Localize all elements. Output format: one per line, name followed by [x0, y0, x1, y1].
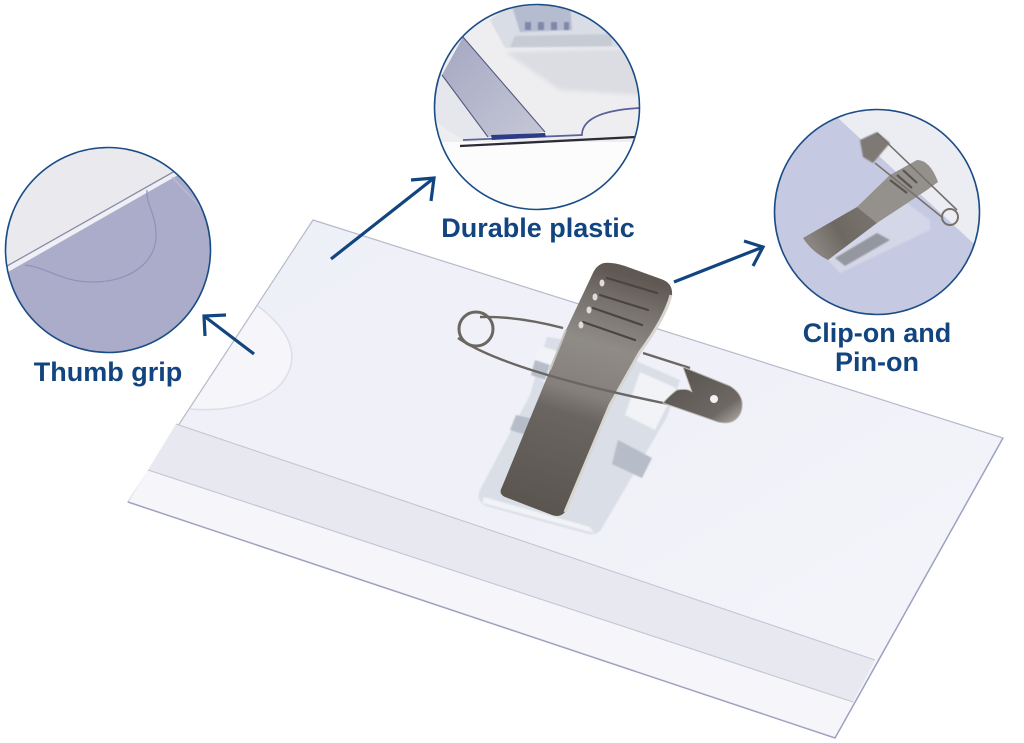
pin [860, 132, 890, 163]
thumb grip cutout [190, 306, 292, 410]
reinforced band [148, 424, 875, 702]
clip slots [583, 278, 657, 340]
clear clip base [828, 203, 930, 273]
lower strip [128, 470, 853, 738]
label: clip-on and pin-on: Clip-on and [803, 318, 951, 348]
circle ring [6, 148, 210, 352]
plastic shadow marks [510, 360, 652, 478]
arrow: to thumb grip [204, 315, 254, 354]
clip left edge highlight [550, 330, 566, 370]
label: thumb grip: Thumb grip [34, 357, 182, 387]
metal clip [501, 263, 672, 516]
safety pin wire [458, 312, 690, 404]
bottom edge [128, 438, 1003, 738]
panel: thumb grip callout [0, 140, 254, 387]
circle photo: thumb grip [0, 140, 215, 355]
circle photo: clip and pin [775, 110, 978, 314]
circle photo: durable plastic edge [435, 5, 639, 148]
label: durable plastic: Durable plastic [441, 213, 635, 243]
metal clip [857, 160, 938, 223]
clip bright edge [565, 295, 671, 512]
safety pin head [663, 367, 742, 423]
circle ring [434, 4, 640, 210]
plastic base highlights [482, 345, 676, 533]
panel: clip-on and pin-on callout: Pin-on [835, 347, 919, 377]
clear plastic base [478, 337, 680, 534]
arrow: to durable plastic [331, 178, 434, 259]
card body [128, 220, 1003, 738]
pin head hole [710, 395, 718, 403]
clip and pin [458, 263, 742, 534]
cutout edge [190, 306, 292, 410]
circle ring [774, 110, 980, 314]
arrow: to clip and pin [674, 241, 763, 282]
panel: durable plastic callout [331, 0, 645, 259]
panel: clip-on and pin-on callout [674, 105, 990, 377]
clip slot highlights [578, 280, 604, 328]
panel: name badge holder [128, 220, 1003, 738]
band edges [148, 424, 875, 702]
